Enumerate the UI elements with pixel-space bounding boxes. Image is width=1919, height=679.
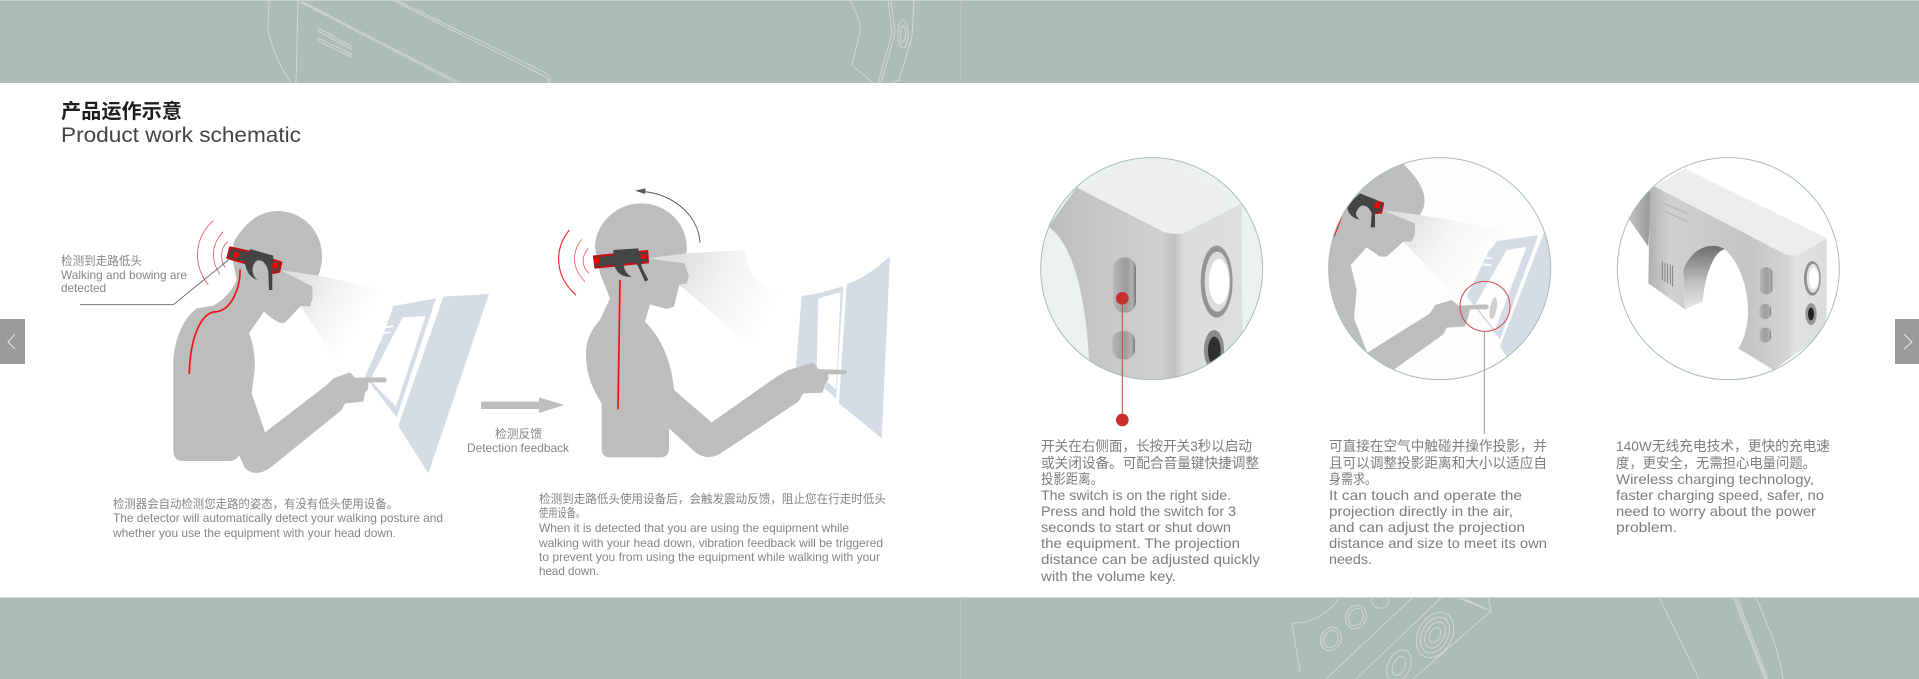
text: power switch: 投影距离。 xyxy=(1041,471,1103,487)
callout leader line xyxy=(80,260,228,305)
text: air touch: projection directly in the air, xyxy=(1329,503,1513,519)
caption: vibration feedback: walking with your head down, vibration feedback will be triggered xyxy=(538,536,883,550)
circle detail: power switch xyxy=(1033,150,1267,426)
caption: posture detection: 检测器会自动检测您走路的姿态，有没有低头使用设备。 xyxy=(113,496,398,511)
screen slots xyxy=(1482,256,1492,266)
text: power switch: with the volume key. xyxy=(1040,568,1176,584)
text: wireless charging xyxy=(1616,438,1830,535)
bottom banner xyxy=(0,589,1919,679)
audio jack xyxy=(1204,330,1224,364)
speaker grill xyxy=(1662,262,1673,287)
text: wireless charging: faster charging speed, safer, no xyxy=(1616,487,1824,503)
rear strap xyxy=(1629,190,1650,246)
caption: vibration feedback: 使用设备。 xyxy=(539,505,585,520)
caption: vibration feedback: When it is detected that you are using the equipment while xyxy=(539,521,849,535)
spine line xyxy=(618,280,620,409)
vibration waves xyxy=(559,230,589,295)
caption: vibration feedback: to prevent you from using the equipment while walking with your xyxy=(539,550,880,564)
volume key xyxy=(1112,331,1135,359)
caption: vibration feedback: head down. xyxy=(539,564,599,578)
circle detail: air touch xyxy=(1328,157,1552,434)
previous page button xyxy=(0,319,25,364)
text: air touch: distance and size to meet its own xyxy=(1329,535,1547,551)
figure: detection feedback xyxy=(481,188,890,457)
head-mounted detector xyxy=(594,248,648,282)
vents xyxy=(1663,203,1687,222)
red pointer to power switch xyxy=(1116,292,1129,426)
text: wireless charging: problem. xyxy=(1616,519,1677,535)
text: air touch: 身需求。 xyxy=(1329,471,1377,487)
text: air touch: needs. xyxy=(1329,551,1372,567)
caption: posture detection xyxy=(112,496,443,540)
person silhouette xyxy=(1329,164,1489,370)
figure: head-down posture detected xyxy=(80,211,489,473)
caption: posture detection: whether you use the equipment with your head down. xyxy=(112,526,396,540)
charging arch inner surface xyxy=(1683,246,1725,309)
text: air touch: 且可以调整投影距离和大小以适应自 xyxy=(1329,455,1547,471)
caption: vibration feedback xyxy=(538,491,886,578)
text: power switch: The switch is on the right side. xyxy=(1041,487,1231,503)
text: power switch: seconds to start or shut down xyxy=(1041,519,1231,535)
device top face xyxy=(1655,168,1827,255)
text: power switch: 开关在右侧面，长按开关3秒以启动 xyxy=(1041,438,1252,454)
title xyxy=(61,99,301,147)
text: power switch: Press and hold the switch for 3 xyxy=(1041,503,1236,519)
projection beam xyxy=(647,250,800,363)
screen projection xyxy=(796,256,890,438)
title: 产品运作示意 xyxy=(61,99,182,123)
text: air touch: and can adjust the projection xyxy=(1329,519,1525,535)
text: wireless charging: need to worry about the power xyxy=(1616,503,1816,519)
text: power switch: distance can be adjusted quickly xyxy=(1041,551,1260,567)
title: Product work schematic xyxy=(61,124,301,147)
device body xyxy=(1048,187,1243,383)
text: wireless charging: Wireless charging technology, xyxy=(1616,471,1814,487)
arrow: to next state xyxy=(481,397,564,413)
person silhouette xyxy=(173,211,387,473)
caption: posture detection: The detector will automatically detect your walking posture and xyxy=(113,511,443,525)
head-mounted detector xyxy=(1334,193,1383,237)
side buttons xyxy=(1759,267,1772,342)
head-mounted detector xyxy=(227,247,281,290)
projection beam xyxy=(1382,210,1498,266)
top banner xyxy=(0,0,1919,83)
person silhouette xyxy=(586,203,847,457)
label: detection feedback: 检测反馈 xyxy=(495,426,542,441)
spine line xyxy=(189,269,240,374)
red touch highlight with pointer xyxy=(1460,281,1510,434)
screen projection xyxy=(365,294,489,473)
label: detection feedback xyxy=(467,426,570,455)
projector lens xyxy=(1201,246,1233,318)
projection beam xyxy=(280,270,393,367)
next page button xyxy=(1895,319,1919,364)
text: power switch: the equipment. The projection xyxy=(1041,535,1240,551)
callout: walking and bowing detected: 检测到走路低头 xyxy=(61,253,142,268)
device top face xyxy=(1077,188,1094,196)
text: air touch: It can touch and operate the xyxy=(1329,487,1522,503)
audio jack xyxy=(1805,303,1817,325)
text: power switch xyxy=(1040,438,1260,584)
circle detail: wireless charging xyxy=(1613,150,1847,383)
label: detection feedback: Detection feedback xyxy=(467,441,570,455)
callout: walking and bowing detected: detected xyxy=(61,281,106,295)
text: wireless charging: 度，更安全，无需担心电量问题。 xyxy=(1616,455,1816,471)
device body xyxy=(1648,187,1827,370)
text: air touch xyxy=(1329,438,1547,567)
text: power switch: 或关闭设备。可配合音量键快捷调整 xyxy=(1041,455,1259,471)
text: air touch: 可直接在空气中触碰并操作投影，并 xyxy=(1329,438,1547,454)
callout: walking and bowing detected: Walking and bowing are xyxy=(61,268,187,282)
screen projection xyxy=(1466,232,1550,356)
line art: device outline in top banner xyxy=(268,0,914,83)
text: wireless charging: 140W无线充电技术，更快的充电速 xyxy=(1616,438,1830,454)
power switch xyxy=(1113,257,1136,313)
callout: walking and bowing detected xyxy=(61,253,187,295)
line art: device outline in bottom banner xyxy=(1292,589,1783,679)
arrow: head lifting rotation xyxy=(635,188,700,243)
caption: vibration feedback: 检测到走路低头使用设备后，会触发震动反馈，阻止您在行走时低头 xyxy=(539,491,886,506)
vibration waves xyxy=(198,221,228,285)
touch ripple xyxy=(1490,298,1498,320)
projector lens xyxy=(1804,261,1821,296)
